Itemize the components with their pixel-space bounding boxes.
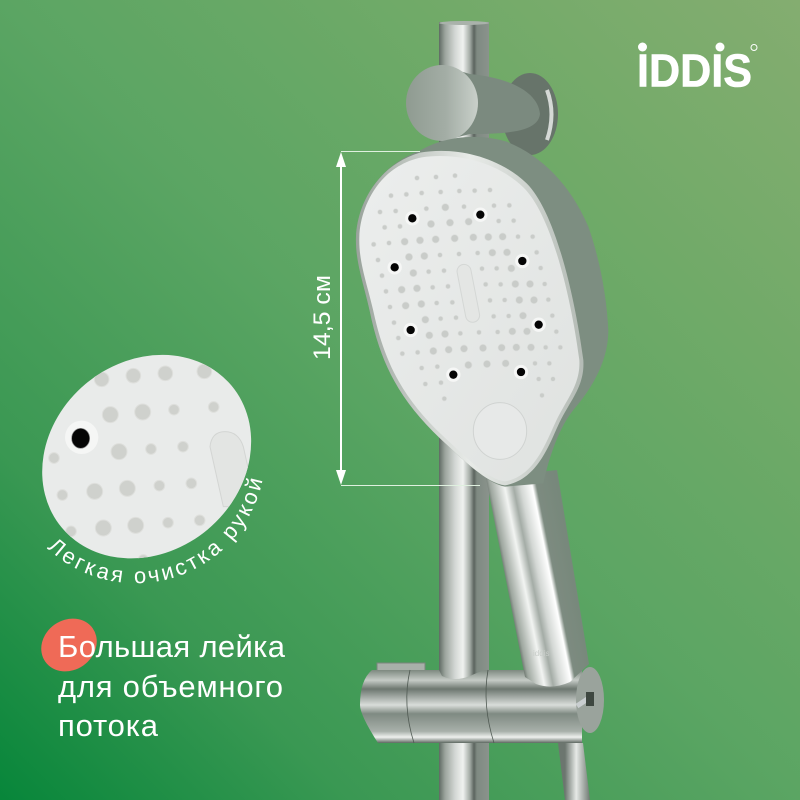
inset black jet	[65, 421, 98, 454]
black jets	[389, 209, 544, 380]
headline: потока	[58, 708, 159, 743]
logo: IDDIS	[637, 44, 752, 96]
wall bracket	[406, 65, 558, 155]
mode button	[473, 403, 527, 459]
inset: nozzle close-up	[42, 354, 252, 558]
clamp end cap	[576, 667, 604, 733]
rail clamp	[360, 663, 582, 743]
inset nozzles	[49, 364, 257, 565]
centre slot	[456, 263, 481, 323]
head back shell	[356, 137, 608, 487]
hose	[558, 743, 590, 800]
red accent blob	[31, 608, 107, 682]
rail tube over clamp	[439, 450, 489, 679]
headline: Большая лейка	[58, 629, 286, 664]
dimension label: 14,5 см	[309, 275, 336, 360]
dimension marker	[336, 152, 480, 486]
hand shower handle	[486, 470, 589, 687]
chrome rim	[356, 151, 583, 485]
headline	[58, 629, 286, 743]
hand shower handle: iddis	[533, 649, 549, 658]
headline: для объемного	[58, 669, 283, 704]
inset caption: Легкая очистка рукой	[46, 478, 262, 584]
shower rail	[439, 21, 489, 800]
soft nozzles	[371, 173, 563, 401]
white spray face	[359, 156, 579, 481]
shower head	[356, 137, 608, 487]
inset disc	[1, 313, 293, 601]
